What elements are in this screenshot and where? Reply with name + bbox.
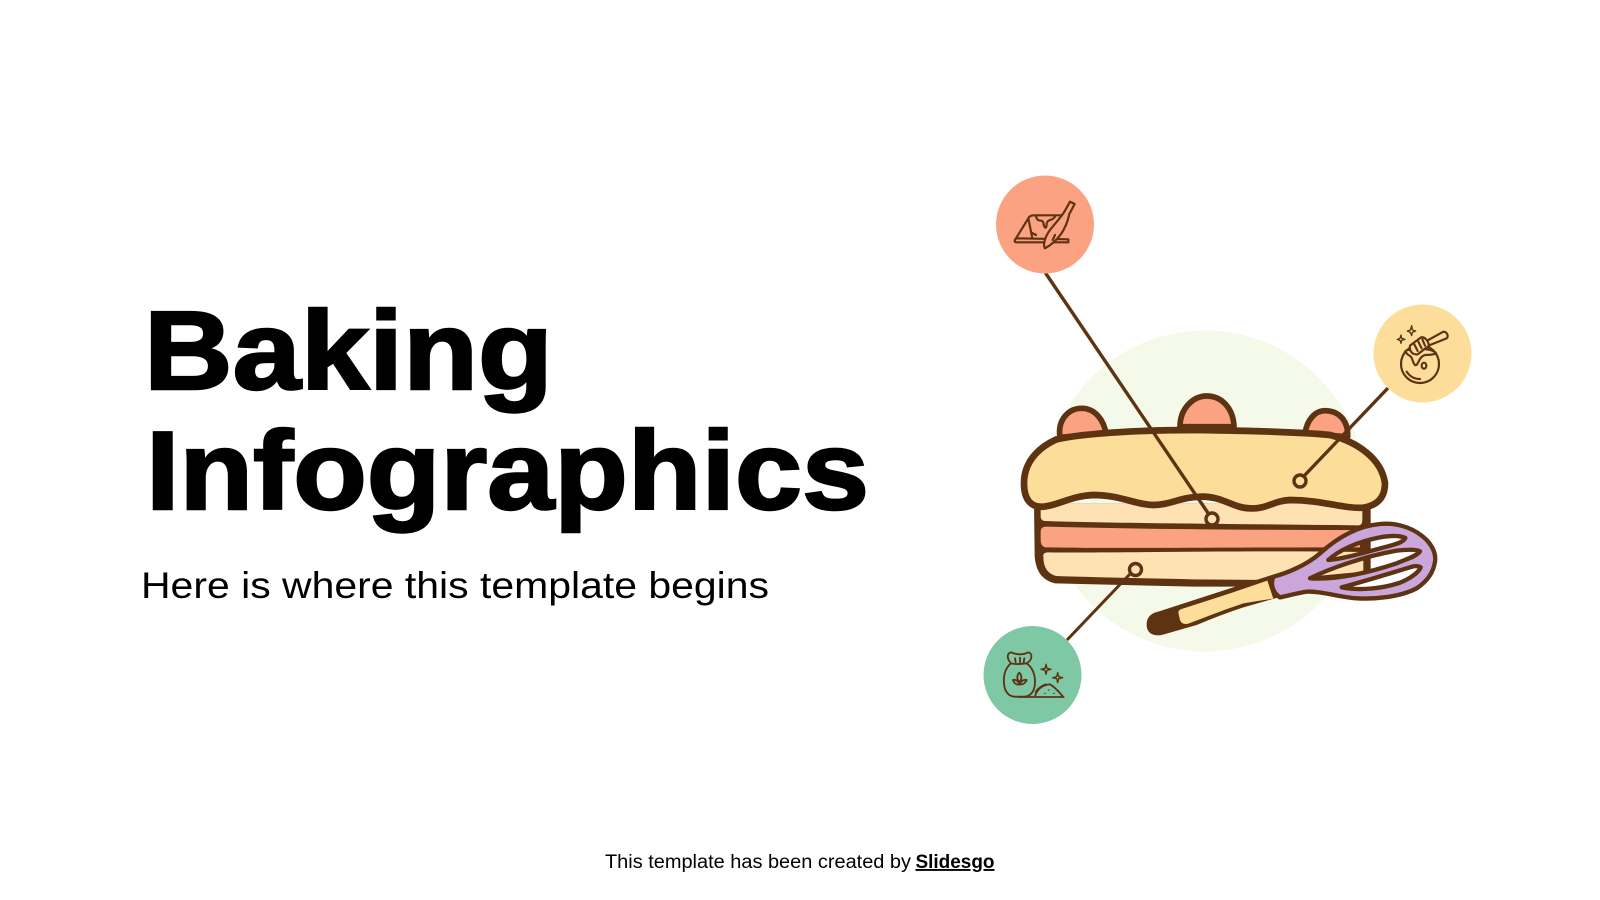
title: Baking bbox=[144, 289, 553, 413]
background circle bbox=[1044, 330, 1366, 652]
whisk handle bbox=[1147, 575, 1278, 635]
cake body layers bbox=[1034, 503, 1371, 587]
connector: yellow callout bbox=[1294, 388, 1388, 487]
cake bbox=[1024, 396, 1385, 587]
callout: green circle with flour icon bbox=[984, 626, 1082, 724]
cake toppings bbox=[1060, 396, 1348, 437]
title bbox=[144, 289, 869, 533]
title: Infographics bbox=[146, 409, 869, 533]
illustration: cake and whisk with callouts bbox=[984, 176, 1472, 724]
footer credit: This template has been created by bbox=[605, 852, 912, 873]
cake top bun bbox=[1024, 430, 1385, 508]
icon: baking tray and rolling pin bbox=[1015, 202, 1075, 248]
whisk bbox=[1147, 524, 1435, 635]
callout: yellow circle with honey icon bbox=[1374, 304, 1472, 402]
whisk head bbox=[1272, 524, 1435, 599]
subtitle: Here is where this template begins bbox=[141, 565, 769, 606]
connector: orange callout bbox=[1046, 273, 1218, 525]
connector: green callout bbox=[1067, 564, 1142, 640]
icon: flour sack bbox=[1004, 652, 1064, 697]
callout: orange circle with tray icon bbox=[996, 176, 1094, 274]
footer credit: Slidesgo bbox=[916, 852, 994, 873]
icon: honey pot and dipper bbox=[1397, 326, 1448, 383]
